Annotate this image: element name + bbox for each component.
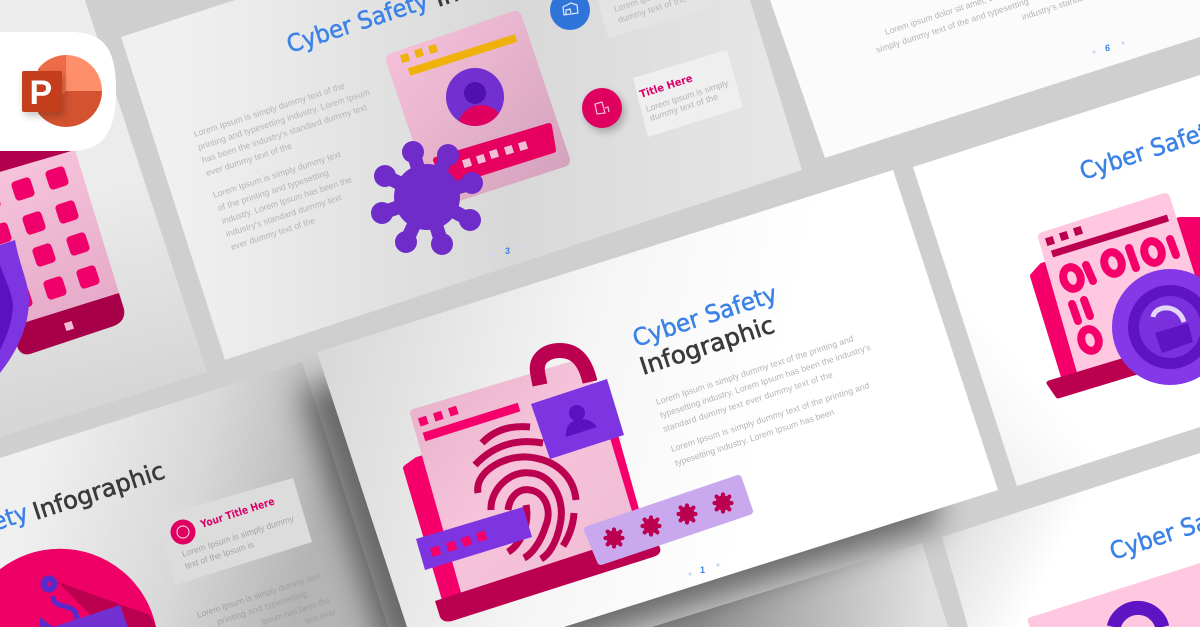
slide 3 body text: printing and typesetting industry. Lorem Ipsum: [197, 87, 371, 152]
slide 3 icon: blue circle: [550, 0, 590, 30]
lower left card: text of the Ipsum is: [184, 539, 255, 571]
slide: top right, page 6: [770, 0, 1200, 158]
main title: Cyber Safety: [629, 280, 781, 353]
slide 3 body text: Lorem Ipsum is simply dummy text of the: [193, 80, 346, 139]
lower left title: [0, 457, 168, 571]
slide 3 body text: ever dummy text of the: [230, 215, 317, 252]
slide 3 card: title here: dummy text of the: [649, 91, 719, 123]
slide 3 body text: of the printing and typesetting: [217, 167, 330, 213]
password bar: small purple: [416, 507, 532, 570]
slide: upper left, page 3: [121, 0, 802, 360]
slide 3 page number: [492, 244, 523, 257]
main page number: [688, 563, 720, 576]
slide 3 icon: crimson circle: [582, 88, 625, 132]
slide: bottom middle: [652, 543, 948, 627]
slide 3 title: [283, 0, 573, 59]
slide 6 page number: 6: [1105, 43, 1110, 53]
lower left illustration: pink circle with device: [0, 549, 156, 627]
main title: [629, 280, 781, 381]
slide 3 body text: ever dummy text of the: [205, 141, 293, 178]
lower left title: Infographic: [29, 457, 168, 526]
slide 3 card: title here: [633, 50, 743, 137]
lower left body text: Ipsum has been the: [260, 595, 331, 627]
main body text: Lorem Ipsum is simply dummy text of the printing and: [670, 380, 871, 454]
bottom right illustration: [1028, 563, 1200, 627]
slide 3 body text: has been the industry's standard dummy text: [201, 102, 369, 165]
icon: tablet: [0, 150, 124, 354]
main body text: typesetting industry. Lorem Ipsum has been the industry's: [659, 342, 872, 420]
slide 3 body text: industry's standard dummy text: [225, 192, 343, 239]
slide 6 page number: [1092, 41, 1125, 54]
slide 3 body text: industry. Lorem Ipsum has been the: [221, 174, 353, 226]
panel: main slide: [317, 170, 998, 627]
illustration: laptop window with fingerprint: [406, 362, 660, 622]
main body text: typesetting industry. Lorem Ipsum has been: [674, 407, 836, 468]
slide 6 body text: [875, 0, 1122, 55]
lower left body text: printing and typesetting: [216, 588, 308, 627]
slide: bottom right: [942, 453, 1200, 627]
icon: laptop with binary code: [1033, 198, 1200, 396]
lower left card: Your Title Here: [198, 496, 276, 531]
slide 3 icon: virus: [371, 141, 483, 255]
slide 3 card: top: [598, 0, 712, 38]
main title: Infographic: [636, 311, 778, 381]
icon: circular unlocked padlock: [1112, 269, 1200, 385]
main page number: 1: [700, 565, 705, 575]
icon: shield: [0, 240, 29, 373]
main body text: [655, 333, 872, 468]
main body text: Lorem Ipsum is simply dummy text of the printing and: [655, 333, 855, 407]
main slide shadow: [300, 187, 940, 627]
lower left card: [157, 478, 312, 585]
icon: PowerPoint logo: P: [30, 74, 52, 112]
PowerPoint badge: [0, 32, 116, 151]
slide 3 body text: Lorem Ipsum is simply dummy text: [212, 149, 343, 200]
slide 3 page number: 3: [505, 246, 510, 256]
slide: top left, tablet: [0, 0, 207, 437]
main body text: standard dummy text ever dummy text of the: [662, 369, 834, 434]
icon: fingerprint: [475, 427, 576, 559]
password bar: lavender with asterisks: [588, 479, 749, 561]
slide: right, page binary lock: [913, 75, 1200, 486]
slide 3 body text: [193, 80, 371, 252]
icon: padlock with person: [531, 350, 624, 459]
slide: lower left, infographic: [0, 362, 388, 627]
lower left card: Lorem Ipsum is simply dummy: [181, 513, 296, 559]
lower left body text: text ever: [304, 606, 337, 626]
slide 3 illustration: browser window and profile: [393, 18, 563, 200]
slide 3 card: title here: Lorem Ipsum is simply: [645, 78, 730, 114]
lower left body text: Lorem Ipsum is simply dummy text: [196, 570, 322, 620]
slide 3 card: title here: Title Here: [638, 72, 694, 101]
